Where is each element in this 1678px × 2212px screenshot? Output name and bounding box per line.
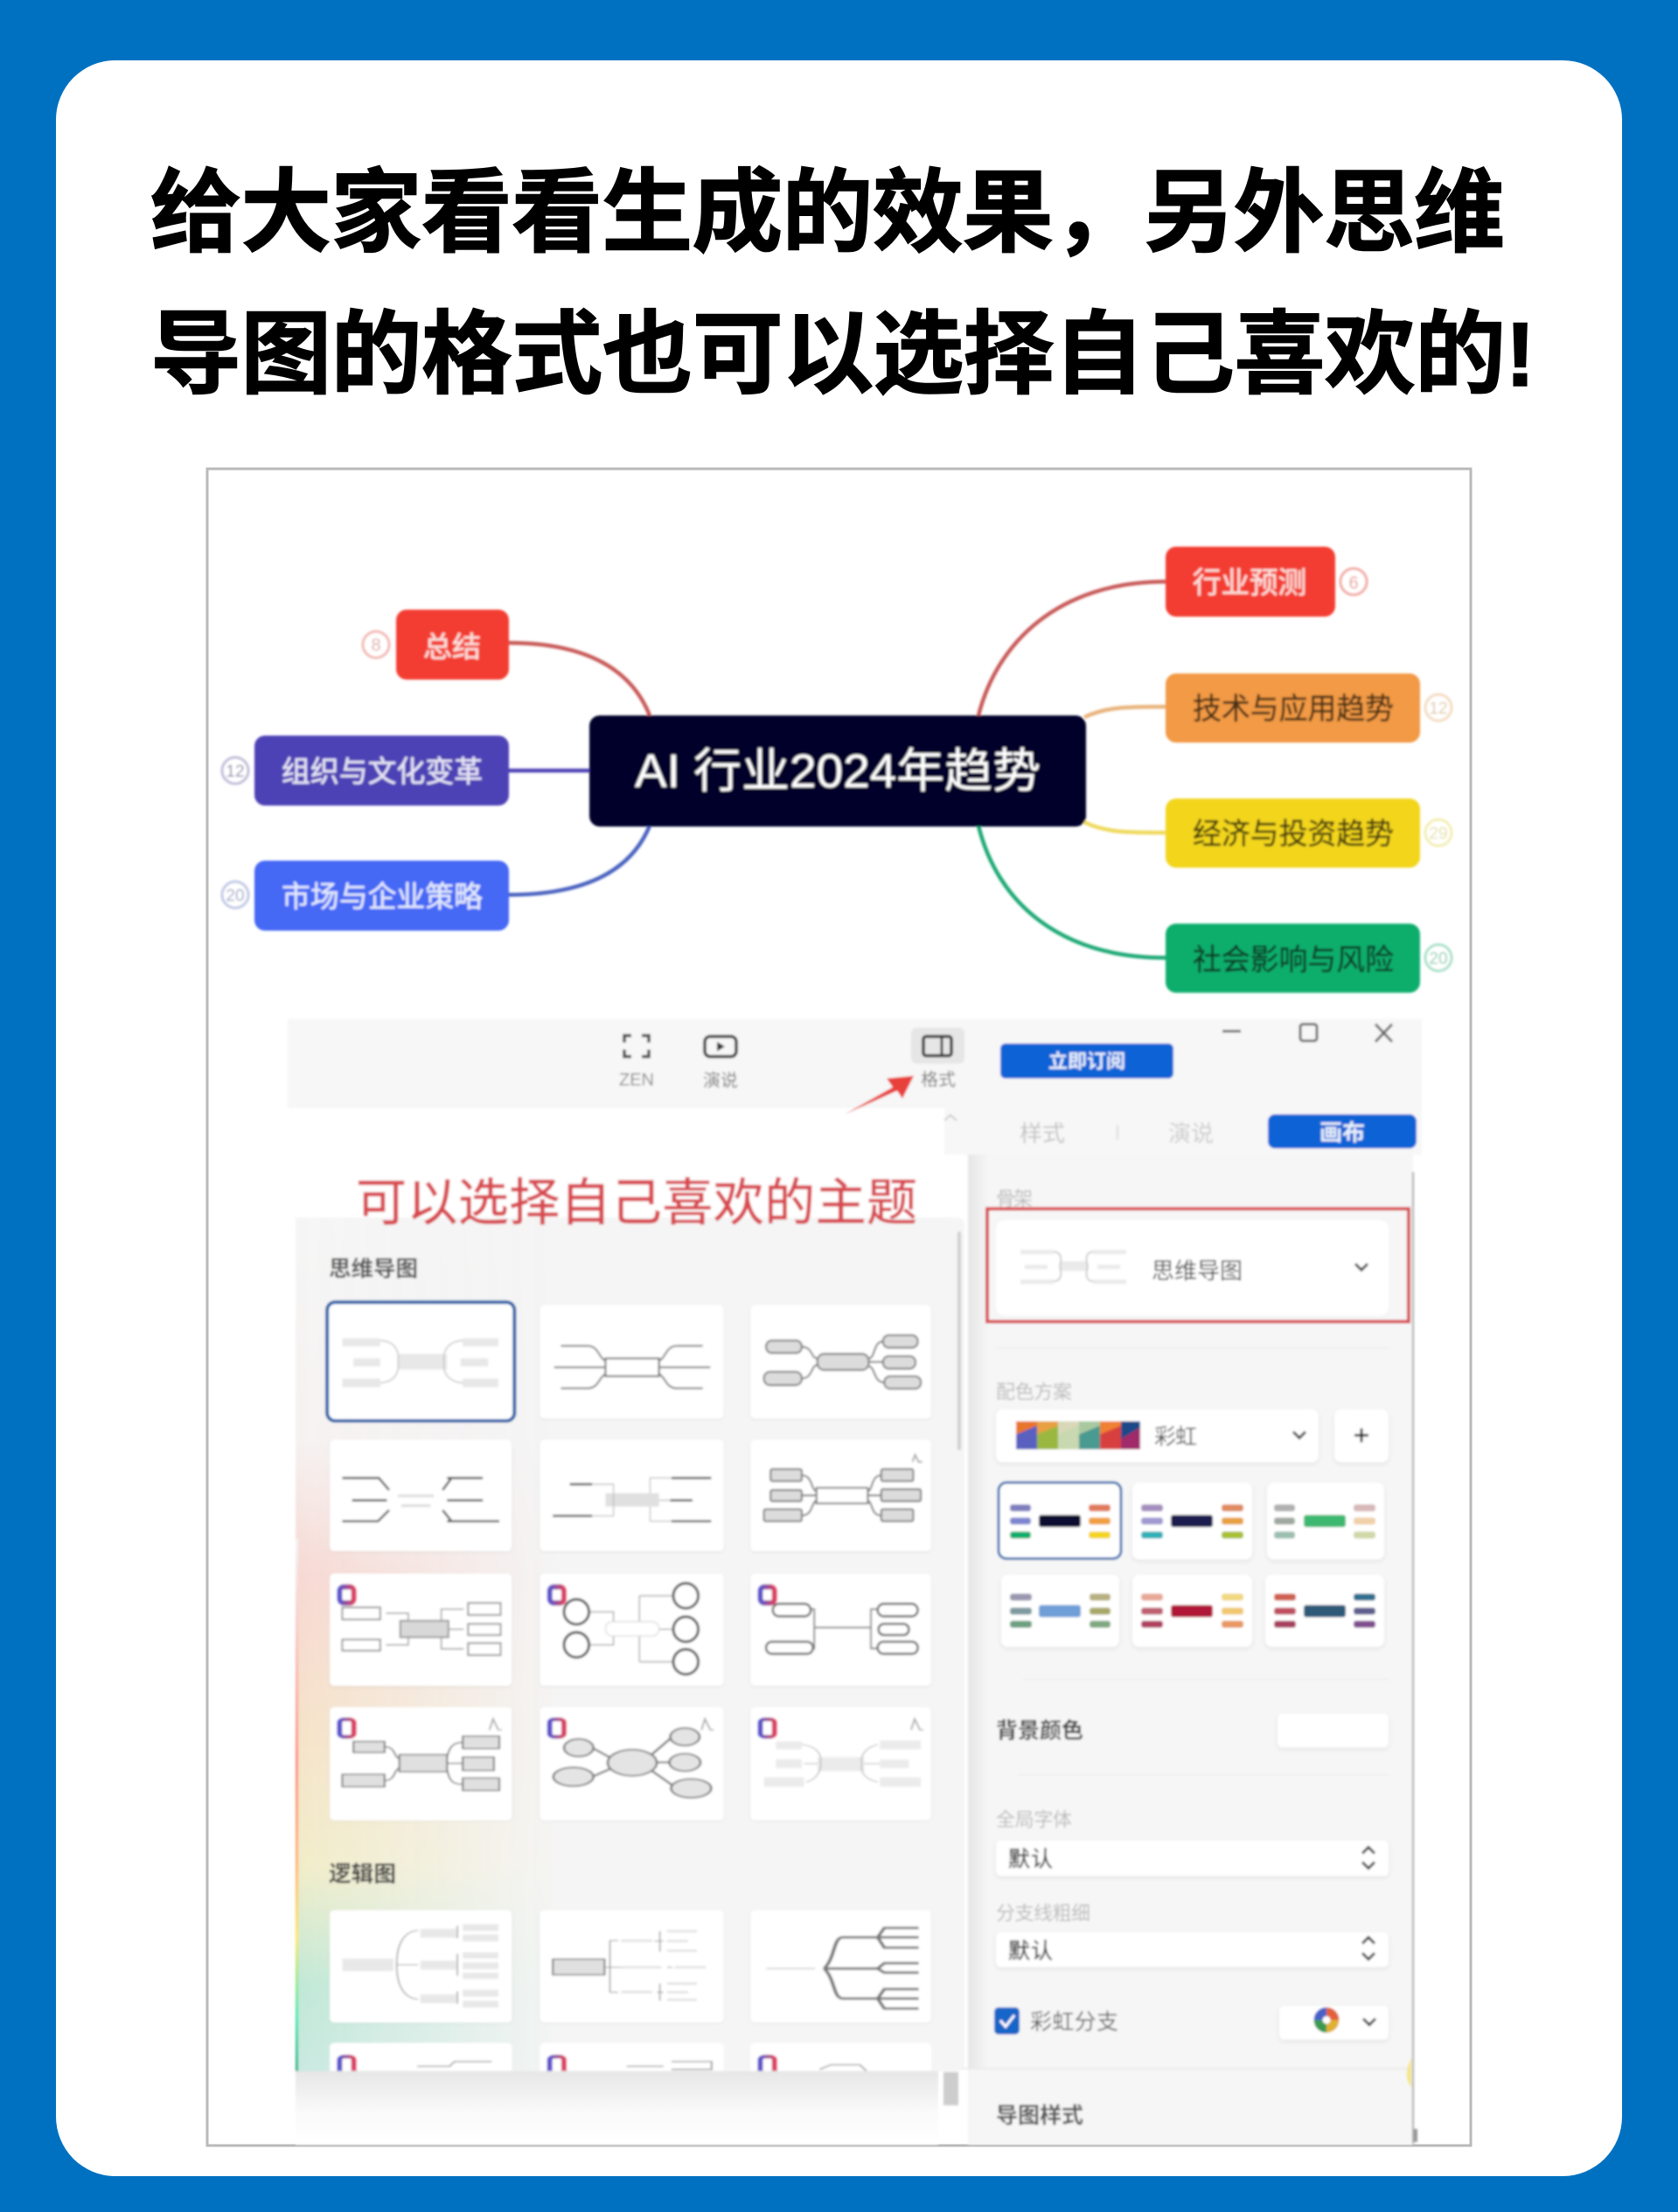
small scroll tick — [1414, 2129, 1417, 2142]
card bracket theme — [540, 1440, 724, 1551]
card pale theme — [750, 1707, 931, 1820]
card logic bracket theme — [540, 1910, 724, 2022]
colour theme card 6 — [1265, 1574, 1384, 1647]
format tabs: 画布 — [1319, 1120, 1365, 1146]
setting: 分支线粗细: 默认 — [1008, 1939, 1053, 1964]
colour theme card 5 — [1132, 1574, 1252, 1647]
arrow: pointing to 格式 — [845, 1076, 914, 1114]
divider — [1023, 1678, 1389, 1680]
node: 技术与应用趋势 — [1166, 673, 1452, 743]
node: 行业预测: 行业预测 — [1193, 567, 1306, 600]
icon: ZEN: ZEN — [619, 1071, 654, 1090]
card logic pale theme — [330, 1910, 512, 2022]
colour theme card 2 — [1132, 1483, 1252, 1560]
card logic lines theme — [750, 1910, 931, 2022]
toolbar — [288, 1019, 1422, 1155]
setting: 导图样式: 导图样式 — [996, 2104, 1083, 2128]
small yellow mark — [1407, 2057, 1411, 2088]
setting: 背景颜色: 背景颜色 — [996, 1719, 1083, 1743]
red highlight box — [987, 1209, 1409, 1322]
divider — [962, 2068, 1410, 2069]
heading: 思维导图: 思维导图 — [329, 1257, 418, 1281]
card pill theme — [750, 1305, 931, 1419]
setting: 分支线粗细: 分支线粗细 — [996, 1902, 1090, 1924]
node: 组织与文化变革 — [222, 736, 509, 806]
skeleton selector: 思维导图 — [1152, 1258, 1243, 1284]
node: 行业预测 — [1166, 547, 1367, 617]
panel: format settings — [962, 1155, 1417, 2145]
node: 经济与投资趋势: 29 — [1429, 825, 1448, 843]
divider — [996, 1347, 1389, 1349]
format tabs: 样式 — [1020, 1120, 1065, 1147]
lower scrollbar — [943, 2072, 958, 2105]
title heading: 给大家看看生成的效果，另外思维 — [150, 163, 1505, 264]
icon: 演说: 演说 — [703, 1071, 738, 1091]
title heading — [150, 163, 1535, 406]
icon: ZEN — [619, 1036, 654, 1090]
scroll chevron — [944, 1115, 957, 1120]
gallery bottom fade — [296, 2071, 938, 2145]
heading: 逻辑图: 逻辑图 — [329, 1862, 396, 1887]
setting: 彩虹分支: 彩虹分支 — [1030, 2010, 1118, 2034]
theme cards top — [327, 1302, 931, 1686]
node: 行业预测: 6 — [1348, 574, 1359, 593]
node: 组织与文化变革: 12 — [226, 763, 245, 781]
card selected — [327, 1302, 514, 1420]
setting: 彩虹分支 — [994, 2006, 1389, 2040]
colour theme card 1 — [999, 1483, 1121, 1559]
skeleton selector — [996, 1220, 1389, 1315]
node: 技术与应用趋势: 12 — [1429, 700, 1448, 718]
red annotation heading: 可以选择自己喜欢的主题 — [356, 1175, 917, 1232]
node: 经济与投资趋势 — [1166, 799, 1452, 868]
app window screenshot — [288, 1019, 1422, 2145]
card organic theme — [540, 1707, 724, 1820]
icon: colour ring — [1319, 2012, 1334, 2028]
setting: 背景颜色 — [996, 1713, 1389, 1748]
add scheme button — [1334, 1409, 1389, 1462]
node: 经济与投资趋势: 经济与投资趋势 — [1193, 818, 1394, 851]
branch connectors — [509, 582, 1166, 958]
node: 社会影响与风险: 20 — [1429, 950, 1448, 968]
colour theme card 3 — [1267, 1483, 1384, 1560]
setting: 全局字体: 全局字体 — [996, 1809, 1072, 1831]
central node: AI 行业2024年趋势 — [635, 745, 1041, 798]
colour scheme dropdown — [996, 1409, 1319, 1462]
card ellipses theme — [750, 1574, 931, 1686]
theme cards bottom — [330, 1707, 931, 2105]
setting: 全局字体 — [996, 1809, 1389, 1876]
card rect theme — [330, 1707, 512, 1820]
screenshot frame — [207, 469, 1471, 2146]
node: 社会影响与风险: 社会影响与风险 — [1193, 944, 1394, 977]
gallery scrollbar — [957, 1232, 961, 1450]
label: 骨架: 骨架 — [996, 1188, 1033, 1210]
format tabs — [1020, 1114, 1417, 1148]
node: 市场与企业策略: 20 — [226, 887, 245, 905]
card line theme — [540, 1305, 724, 1419]
colour scheme dropdown: 彩虹 — [1154, 1425, 1197, 1449]
node: 技术与应用趋势: 技术与应用趋势 — [1193, 693, 1394, 726]
card arrow theme — [330, 1574, 512, 1686]
central node — [589, 715, 1086, 827]
card boxed theme — [750, 1440, 931, 1551]
setting: 分支线粗细 — [996, 1902, 1389, 1967]
icon: 格式 button — [911, 1028, 964, 1090]
title heading: 导图的格式也可以选择自己喜欢的! — [150, 304, 1535, 406]
node: 总结: 8 — [371, 636, 381, 655]
window subscribe button — [1000, 1043, 1173, 1078]
node: 市场与企业策略 — [222, 861, 509, 931]
panel: theme gallery — [296, 1218, 964, 2105]
window controls — [1222, 1024, 1392, 1042]
card circles theme — [540, 1574, 724, 1686]
node: 总结: 总结 — [423, 631, 481, 663]
white theme title area — [296, 1108, 944, 1222]
colour theme card 4 — [1001, 1574, 1119, 1647]
node: 总结 — [363, 610, 509, 680]
icon: 格式 button: 格式 — [921, 1070, 956, 1090]
divider — [1019, 1774, 1389, 1776]
label: 配色方案: 配色方案 — [996, 1381, 1072, 1403]
format tabs: 演说 — [1168, 1120, 1214, 1147]
card bold lines theme — [330, 1440, 512, 1551]
setting: 全局字体: 默认 — [1008, 1847, 1053, 1872]
node: 组织与文化变革: 组织与文化变革 — [282, 756, 483, 789]
mind map chart — [222, 547, 1452, 993]
rainbow swatch — [1016, 1421, 1140, 1449]
window subscribe button: 立即订阅 — [1048, 1050, 1125, 1072]
node: 市场与企业策略: 市场与企业策略 — [282, 881, 483, 914]
icon: 演说 — [703, 1036, 738, 1091]
clipped bottom row cards — [329, 2041, 930, 2073]
node: 社会影响与风险 — [1166, 924, 1452, 993]
